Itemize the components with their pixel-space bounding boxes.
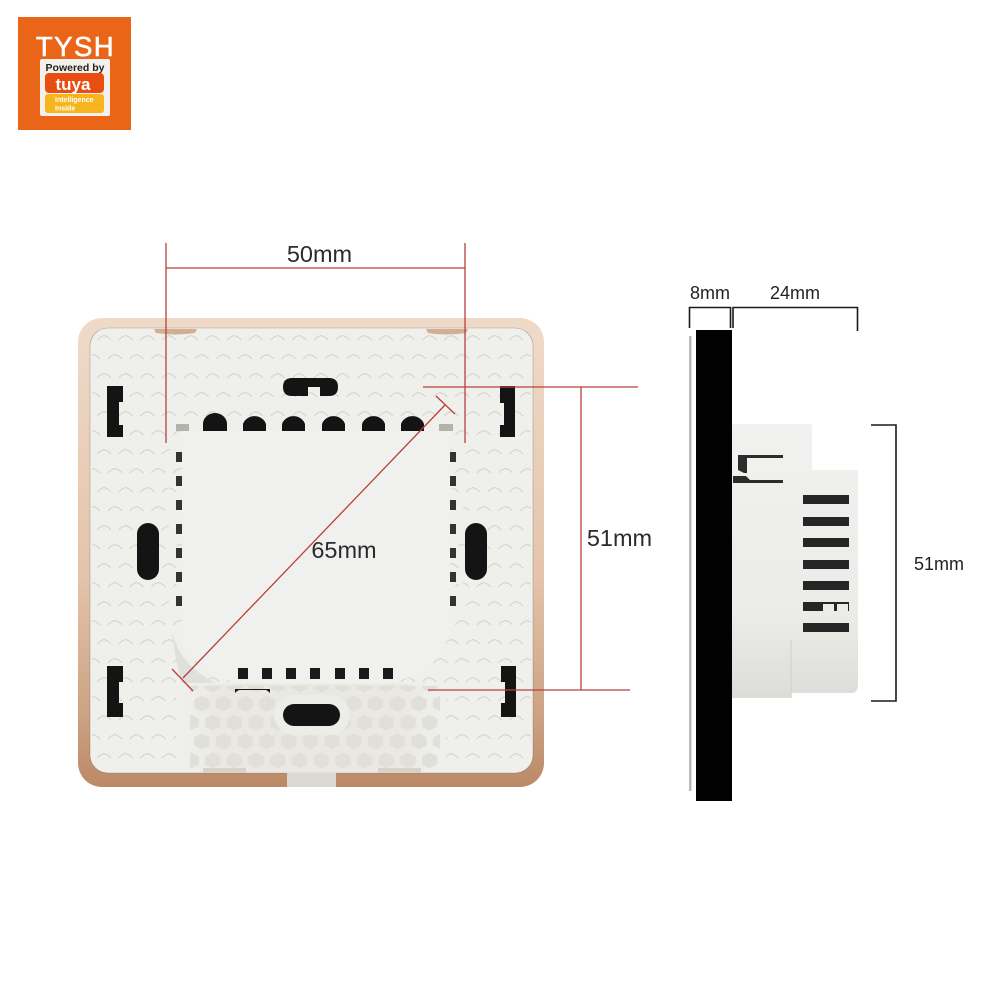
dimension: 65mm diagonal: 65mm [311,537,377,563]
small bottom slot [235,689,270,693]
bottom honeycomb band [176,684,446,772]
dimension: 50mm width: 50mm [287,241,352,267]
logo: TYSH powered by tuya: tuya [56,75,91,94]
dimension: 8mm: 8mm [690,283,730,303]
dimension: 51mm height [423,387,652,690]
gold frame [78,318,544,787]
clip slots [107,386,516,717]
panel: thermostat side view [689,330,858,801]
left side vents [169,450,182,608]
logo: TYSH powered by tuya: Powered by [46,62,105,74]
top clip notches [154,329,468,334]
switch detail [823,604,848,611]
panel: thermostat back view [78,318,544,787]
top oblong slot [283,378,338,396]
dimension: 51mm height: 51mm [587,525,652,551]
right oblong slot [465,523,487,580]
bottom vents [238,668,393,679]
glass edge highlight [689,336,692,791]
right side vents [450,450,463,608]
honeycomb texture [92,332,531,771]
dimension: 8mm [690,283,730,328]
dimension: 51mm depth bracket [871,425,964,701]
small tabs [176,424,453,431]
bottom frame tabs [203,768,421,773]
logo: TYSH powered by tuya [18,17,131,130]
dimension: 24mm: 24mm [770,283,820,303]
central module [176,430,450,683]
left oblong slot [137,523,159,580]
dimension: 65mm diagonal [172,396,455,691]
vent slots [803,495,849,632]
black glass panel [696,330,732,801]
logo: TYSH powered by tuya: Intelligence [55,97,94,104]
bottom oblong slot [274,695,350,735]
white back plate [90,328,533,773]
dimension: 51mm depth bracket: 51mm [914,554,964,574]
dimension: 24mm [733,283,858,331]
dimension: 50mm width [166,241,465,443]
logo: TYSH powered by tuya: Inside [55,106,75,112]
rear body [732,424,858,698]
clip detail [733,455,783,483]
round vents top row [203,413,424,431]
logo: TYSH powered by tuya: TYSH [36,31,115,62]
